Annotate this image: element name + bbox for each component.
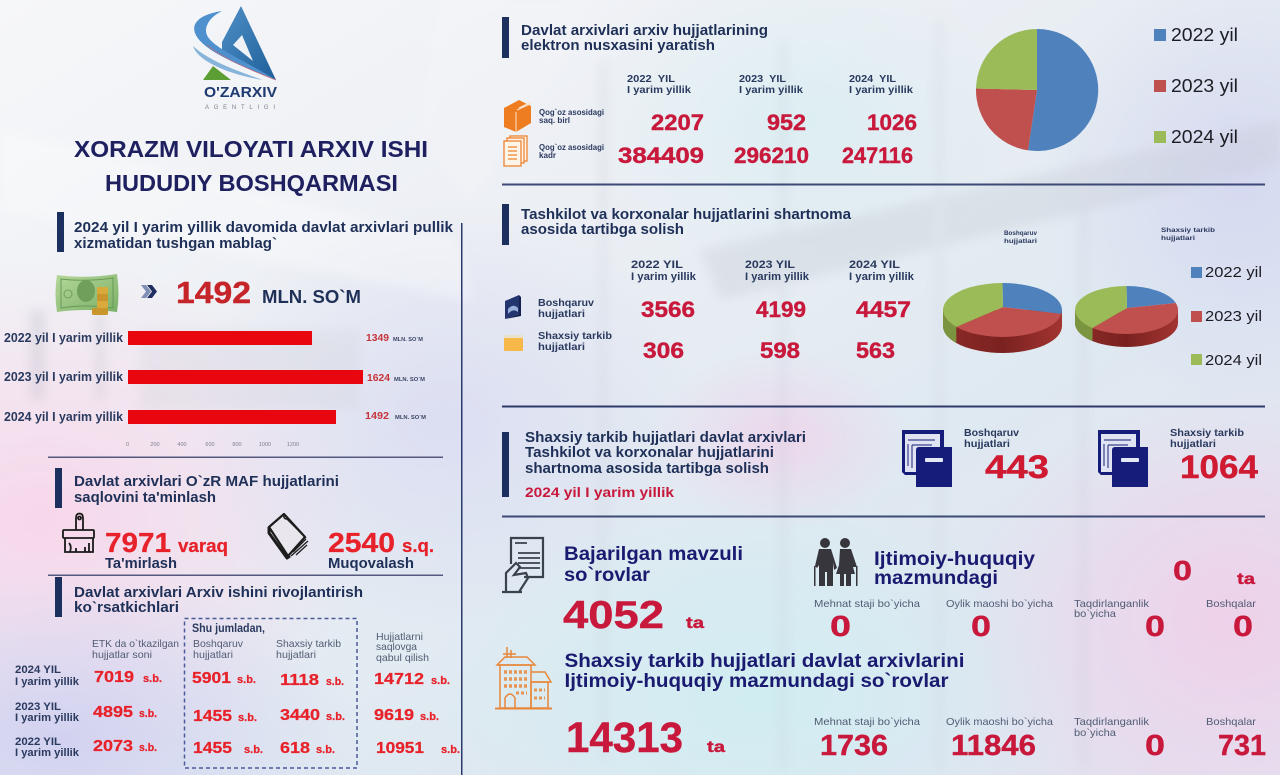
value: ta	[686, 615, 704, 632]
legend: 2023 yil	[1171, 76, 1238, 96]
row labels: Qog`oz asosidagi	[539, 143, 604, 152]
binding value: 2540	[328, 527, 395, 558]
total value	[1173, 555, 1255, 588]
values: 2023	[93, 704, 439, 725]
values: 2022: 1455	[193, 740, 232, 757]
bar chart: 800	[232, 442, 242, 448]
panel: organization documents	[502, 204, 1262, 369]
category labels	[814, 716, 1257, 739]
label and value: shaxsiy tarkib	[1170, 427, 1258, 485]
icon: orange building	[495, 647, 552, 708]
values: 2024	[94, 669, 450, 689]
column headers: 2023 YIL	[745, 259, 795, 271]
panel: electronic copies	[502, 17, 1238, 168]
repair value: 7971	[105, 527, 171, 558]
row labels: 2022 YIL	[15, 736, 61, 748]
section heading: personnel documents: shartnoma asosida tartibga solish	[525, 460, 769, 477]
heading: Bajarilgan mavzuli	[564, 544, 743, 565]
column headers: I yarim yillik	[631, 271, 697, 283]
values: 2024: s.b.	[431, 675, 450, 687]
heading: mazmundagi	[874, 568, 998, 589]
legend	[1154, 25, 1238, 147]
section heading: electronic copies: elektron nusxasini yaratish	[521, 37, 715, 54]
panel: social-legal requests	[814, 538, 1257, 643]
icon: yellow folder	[504, 335, 523, 351]
column headers: I yarim yillik	[745, 271, 810, 283]
bar chart: 600	[205, 442, 215, 448]
section heading: preservation: Davlat arxivlari O`zR MAF hujjatlarini	[74, 473, 339, 490]
category labels: Oylik maoshi bo`yicha	[946, 598, 1053, 610]
chart title: shaxsiy tarkib	[1161, 227, 1215, 242]
repair value: varaq	[178, 536, 228, 556]
values: 1026	[867, 110, 917, 135]
icon: navy folder	[1098, 430, 1148, 487]
category labels	[814, 598, 1257, 620]
values: 2023: s.b.	[326, 711, 345, 723]
bar chart: 2022 yil I yarim yillik	[4, 331, 123, 345]
column headers: saqlovga	[376, 641, 417, 653]
value: 4052	[563, 594, 664, 637]
section heading: revenue	[57, 212, 454, 252]
row labels	[539, 108, 604, 160]
category values: 0	[971, 611, 991, 643]
values: 2022: s.b.	[441, 744, 460, 756]
pie chart	[976, 29, 1098, 151]
category values	[830, 611, 1253, 643]
title: XORAZM VILOYATI ARXIV ISHI	[74, 136, 428, 162]
icon: blue book	[505, 295, 521, 319]
title	[74, 136, 428, 196]
column headers: 2022 YIL	[631, 259, 683, 271]
heading	[564, 544, 743, 586]
values: 2023: 4895	[93, 704, 133, 721]
values: 2207	[651, 110, 704, 135]
heading: Ijtimoiy-huquqiy	[874, 549, 1035, 570]
chart title: boshqaruv	[1004, 230, 1037, 245]
panel: personnel social-legal requests	[495, 647, 1266, 762]
legend: 2022 yil	[1205, 264, 1262, 281]
section heading: indicators: ko`rsatkichlari	[74, 599, 179, 616]
total value: ta	[1237, 571, 1255, 588]
values: 2024: 14712	[374, 671, 424, 688]
category values: 1736	[820, 730, 888, 762]
section heading: preservation	[55, 468, 339, 508]
logo: O'zarxiv agentligi: O'ZARXIV	[204, 84, 277, 101]
category labels: Mehnat staji bo`yicha	[814, 716, 920, 728]
3d pie: shaxsiy tarkib	[1075, 286, 1178, 347]
heading	[564, 651, 964, 692]
category values: 0	[1233, 611, 1253, 643]
heading: so`rovlar	[564, 565, 651, 586]
row labels: hujjatlari	[538, 341, 585, 353]
bar chart: MLN. SO`M	[395, 415, 426, 421]
values: 2024: s.b.	[143, 673, 162, 685]
binding value: s.q.	[402, 536, 434, 556]
section heading: preservation: saqlovini ta'minlash	[74, 489, 216, 506]
category labels: bo`yicha	[1074, 608, 1116, 620]
icon: elderly couple	[814, 538, 858, 586]
section heading: personnel documents: Shaxsiy tarkib hujjatlari davlat arxivlari	[525, 429, 806, 446]
chart title: boshqaruv: hujjatlari	[1004, 238, 1037, 245]
values: 563	[856, 338, 895, 363]
bar chart: 0	[126, 442, 129, 448]
bar chart: 1000	[259, 442, 271, 448]
section heading: electronic copies: Davlat arxivlari arxiv hujjatlarining	[521, 22, 768, 39]
values: 2023: 1455	[193, 708, 232, 725]
row labels: saq. birl	[539, 116, 570, 125]
column headers: 2024 YIL	[849, 73, 897, 85]
chart title: shaxsiy tarkib: Shaxsiy tarkib	[1161, 227, 1215, 234]
values	[618, 110, 917, 168]
values	[641, 297, 911, 363]
label: shu jumladan: Shu jumladan,	[192, 623, 265, 635]
icon: chevrons	[141, 285, 157, 298]
row labels: 2023 YIL	[15, 701, 61, 713]
values: 2024: 7019	[94, 669, 134, 686]
row labels: Boshqaruv	[538, 297, 594, 309]
values: 4457	[856, 297, 911, 322]
column headers: qabul qilish	[376, 652, 429, 664]
icon: navy folder	[902, 430, 952, 487]
total value: MLN. SO`M	[262, 287, 361, 307]
column headers: Shaxsiy tarkib	[276, 638, 341, 650]
column headers: I yarim yillik	[849, 271, 915, 283]
column headers: hujjatlari	[193, 649, 233, 661]
values: 2022	[93, 738, 460, 757]
section heading: revenue: 2024 yil I yarim yillik davomida davlat arxivlari pullik	[74, 219, 454, 236]
column headers: I yarim yillik	[849, 84, 913, 96]
values: 2022: 2073	[93, 738, 133, 755]
category labels: Oylik maoshi bo`yicha	[946, 716, 1053, 728]
section heading: personnel documents: 2024 yil I yarim yillik	[525, 484, 674, 500]
values: 2024: s.b.	[237, 674, 256, 686]
row labels: Shaxsiy tarkib	[538, 330, 612, 342]
repair value	[105, 527, 228, 572]
bar chart: 1624	[367, 372, 390, 384]
column headers: 2022 YIL	[627, 73, 676, 85]
values: 2022: 10951	[376, 740, 424, 757]
values: 306	[643, 338, 684, 363]
values: 598	[760, 338, 800, 363]
bar chart	[4, 331, 426, 448]
legend	[1191, 264, 1262, 369]
section heading: organization documents	[502, 204, 852, 245]
section heading: organization documents: asosida tartibga solish	[521, 221, 684, 238]
column headers: hujjatlari	[276, 649, 316, 661]
row labels: I yarim yillik	[15, 676, 80, 688]
chart title: shaxsiy tarkib: hujjatlari	[1161, 235, 1195, 242]
category values	[820, 730, 1266, 762]
category labels: Mehnat staji bo`yicha	[814, 598, 920, 610]
panel: preservation	[55, 468, 434, 572]
bar chart: 1200	[287, 442, 299, 448]
bar chart: 1349	[366, 332, 389, 344]
section heading: indicators: Davlat arxivlari Arxiv ishini rivojlantirish	[74, 584, 363, 601]
icon: orange books	[504, 100, 531, 132]
category labels: Boshqalar	[1206, 598, 1257, 610]
label and value: boshqaruv: hujjatlari	[964, 438, 1010, 450]
column headers	[627, 73, 913, 96]
values: 2024: 1118	[280, 672, 319, 689]
column headers: Boshqaruv	[193, 638, 244, 650]
values: 247116	[842, 143, 913, 168]
category values: 0	[1145, 611, 1165, 643]
bar chart: 2024 yil I yarim yillik	[4, 410, 123, 424]
row labels	[15, 664, 80, 759]
values: 4199	[756, 297, 806, 322]
section heading: personnel documents	[502, 429, 806, 500]
total value	[176, 275, 361, 310]
row labels: 2024 YIL	[15, 664, 61, 676]
category labels: Taqdirlanganlik	[1074, 716, 1150, 728]
values: 2023: 9619	[374, 707, 414, 724]
values: 384409	[618, 143, 704, 168]
panel: revenue	[4, 212, 454, 448]
bar chart: 2023 yil I yarim yillik	[4, 370, 123, 384]
icon: book	[269, 514, 308, 558]
bar chart: MLN. SO`M	[393, 337, 423, 343]
label and value: shaxsiy tarkib: hujjatlari	[1170, 438, 1216, 450]
row labels: I yarim yillik	[15, 712, 80, 724]
title: HUDUDIY BOSHQARMASI	[105, 170, 398, 196]
chart title: boshqaruv: Boshqaruv	[1004, 230, 1037, 237]
label and value: boshqaruv: 443	[985, 449, 1049, 485]
section heading: organization documents: Tashkilot va korxonalar hujjatlarini shartnoma	[521, 206, 852, 223]
icon: brush	[63, 514, 94, 552]
section heading: revenue: xizmatidan tushgan mablag`	[74, 235, 277, 252]
binding value	[328, 527, 434, 572]
category values: 11846	[951, 730, 1036, 762]
values: 2023: 3440	[280, 707, 320, 724]
column headers	[631, 259, 915, 283]
row labels: kadr	[539, 151, 556, 160]
bar chart: 200	[150, 442, 160, 448]
values: 296210	[734, 143, 809, 168]
values: 2023: s.b.	[420, 711, 439, 723]
panel: personnel documents	[502, 427, 1258, 500]
values: 2024: 5901	[192, 670, 231, 687]
value: ta	[707, 739, 725, 756]
column headers: ETK da o`tkazilgan	[92, 638, 179, 650]
legend: 2022 yil	[1171, 25, 1238, 45]
icon: hand with document	[502, 538, 543, 592]
total value: 0	[1173, 555, 1192, 586]
legend: 2024 yil	[1205, 352, 1262, 369]
values: 2022: s.b.	[244, 744, 263, 756]
legend: 2024 yil	[1171, 127, 1238, 147]
column headers: hujjatlar soni	[92, 649, 152, 661]
section heading: electronic copies	[502, 17, 768, 58]
row labels: hujjatlari	[538, 308, 585, 320]
values: 2023: s.b.	[238, 712, 257, 724]
row labels: Qog`oz asosidagi	[539, 108, 604, 117]
values: 2023: s.b.	[139, 708, 157, 720]
values: 2024: s.b.	[326, 676, 344, 688]
section heading: personnel documents: Tashkilot va korxonalar hujjatlarini	[525, 444, 774, 461]
heading: Shaxsiy tarkib hujjatlari davlat arxivlarini	[564, 651, 964, 672]
label and value: shaxsiy tarkib: 1064	[1180, 449, 1258, 485]
section heading: indicators	[55, 577, 363, 617]
label and value: boshqaruv: Boshqaruv	[964, 427, 1019, 439]
column headers: I yarim yillik	[627, 84, 691, 96]
category labels: bo`yicha	[1074, 727, 1116, 739]
logo: O'zarxiv agentligi: AGENTLIGI	[205, 105, 275, 111]
values: 2022: 618	[280, 740, 310, 757]
category labels: Boshqalar	[1206, 716, 1257, 728]
panel: completed thematic requests	[502, 538, 743, 637]
logo: O'zarxiv agentligi	[193, 6, 277, 111]
column headers: 2023 YIL	[739, 73, 787, 85]
total value: 1492	[176, 275, 251, 310]
heading	[874, 549, 1035, 589]
row labels: I yarim yillik	[15, 747, 80, 759]
label and value: shaxsiy tarkib: Shaxsiy tarkib	[1170, 427, 1244, 439]
column headers: I yarim yillik	[739, 84, 803, 96]
heading: Ijtimoiy-huquqiy mazmundagi so`rovlar	[564, 671, 949, 692]
binding value: Muqovalash	[328, 555, 414, 572]
values: 952	[767, 110, 806, 135]
dashed box	[184, 618, 357, 768]
legend: 2023 yil	[1205, 308, 1262, 325]
bar chart: 1492	[365, 410, 389, 422]
icon: money	[56, 274, 118, 315]
category labels: Taqdirlanganlik	[1074, 598, 1150, 610]
column headers	[92, 631, 429, 664]
repair value: Ta'mirlash	[105, 555, 177, 572]
icon: orange documents	[504, 136, 527, 166]
category values: 0	[830, 611, 851, 643]
label and value: boshqaruv	[964, 427, 1049, 485]
3d pie: boshqaruv	[943, 283, 1062, 353]
column headers: 2024 YIL	[849, 259, 900, 271]
row labels	[538, 297, 612, 353]
column headers: Hujjatlarni	[376, 631, 423, 643]
bar chart: 400	[177, 442, 187, 448]
panel: development indicators	[15, 577, 460, 768]
value: 14313	[566, 714, 683, 762]
values: 3566	[641, 297, 695, 322]
values: 2022: s.b.	[139, 742, 157, 754]
category values: 731	[1218, 730, 1266, 762]
values: 2022: s.b.	[316, 744, 335, 756]
bar chart: MLN. SO`M	[394, 377, 425, 383]
value	[563, 594, 704, 637]
category values: 0	[1145, 730, 1165, 762]
